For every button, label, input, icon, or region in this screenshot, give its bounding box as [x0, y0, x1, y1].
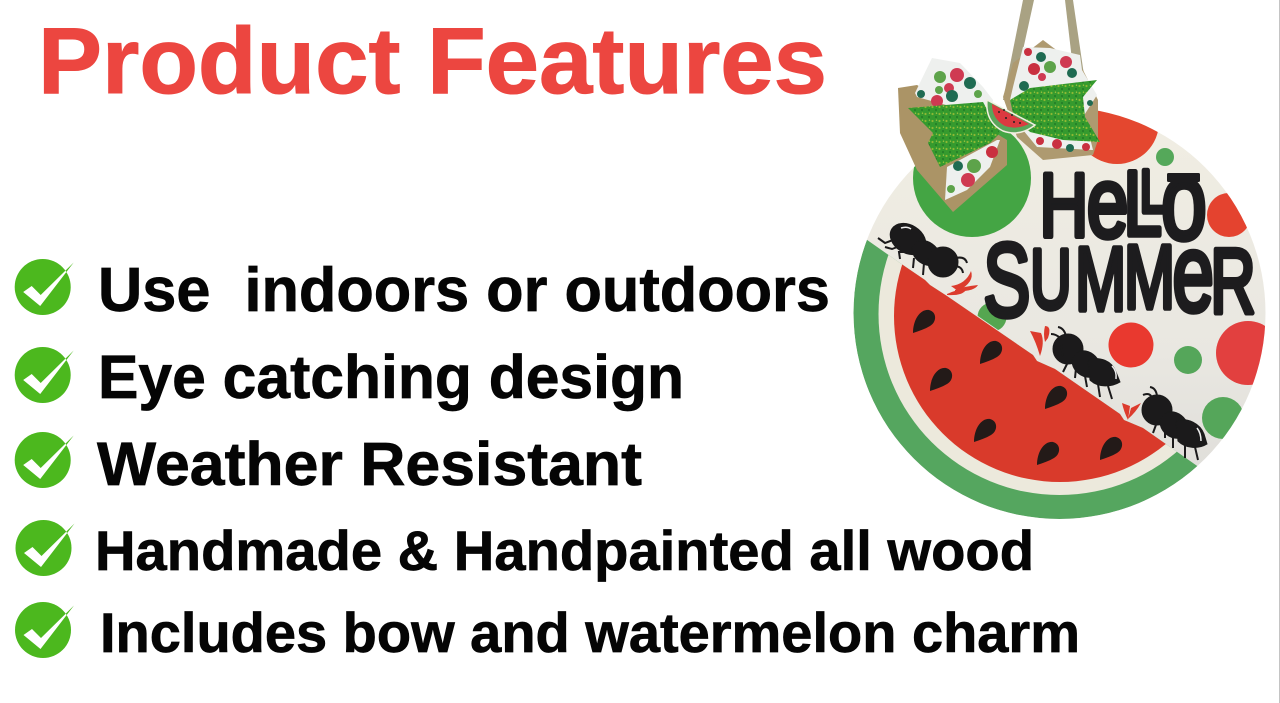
- icon: check badge 4: [16, 520, 74, 576]
- hello summer lettering: e: [1172, 212, 1214, 334]
- hello summer lettering: S: [983, 221, 1030, 338]
- ant 3 highlight: [1197, 428, 1201, 441]
- juice splash 3: [1122, 403, 1141, 420]
- round board: [854, 107, 1266, 519]
- label 4: Handmade & Handpainted all wood: [95, 519, 1034, 582]
- polka ribbon upper left: [915, 58, 993, 117]
- hello summer lettering: L: [1124, 152, 1162, 255]
- product: watermelon door sign: [854, 0, 1280, 519]
- burlap loop right: [1003, 40, 1098, 160]
- ant 3: [1142, 387, 1207, 460]
- glitter tail right: [1010, 80, 1100, 142]
- ant 1 highlight: [901, 227, 911, 229]
- hello summer lettering: R: [1210, 230, 1256, 333]
- hello summer lettering: o: [1161, 139, 1207, 263]
- juice splash 1: [947, 271, 978, 295]
- feature 5: bow and charm: [15, 602, 1077, 658]
- icon: check badge 1: [15, 259, 74, 315]
- hello summer lettering: e: [1087, 146, 1128, 258]
- hello summer lettering: L: [1140, 159, 1165, 226]
- flesh: [894, 264, 1166, 482]
- juice splash 2: [1030, 326, 1049, 356]
- ant 1: [878, 217, 967, 277]
- ant 2 highlight: [1112, 366, 1116, 379]
- label 2: Eye catching design: [98, 343, 684, 411]
- pith: [878, 255, 1177, 495]
- polka dots: [913, 110, 1265, 439]
- hello summer lettering: [983, 139, 1256, 338]
- watermelon slice: [854, 240, 1198, 519]
- polka ribbon lower left: [945, 140, 1000, 200]
- hello summer lettering: M: [1124, 227, 1175, 328]
- polka ribbon upper right: [1010, 47, 1097, 117]
- right edge line: [1279, 0, 1280, 703]
- bow: [898, 40, 1100, 212]
- label 3: Weather Resistant: [97, 430, 642, 498]
- polka ribbon lower right: [1023, 130, 1093, 152]
- label 1: Use indoors or outdoors: [98, 256, 830, 325]
- hello summer lettering: M: [1075, 229, 1126, 330]
- burlap loop left: [898, 85, 1007, 212]
- label 5: Includes bow and watermelon charm: [100, 601, 1080, 664]
- feature 1: indoors or outdoors: [14, 259, 828, 315]
- icon: check badge 2: [15, 347, 74, 403]
- watermelon charm: [987, 100, 1035, 133]
- title: Product Features: [38, 8, 827, 113]
- icon: check badge 5: [15, 602, 74, 658]
- feature 3: weather resistant: [14, 432, 642, 488]
- rind: [854, 240, 1198, 519]
- hanging straps: [1003, 0, 1084, 100]
- hello summer lettering: U: [1030, 233, 1071, 327]
- feature 2: eye catching design: [15, 343, 684, 411]
- glitter tail left: [908, 102, 1000, 167]
- feature list: [15, 256, 1080, 664]
- seeds: [913, 310, 1122, 465]
- ant 2: [1051, 327, 1120, 399]
- hello summer lettering: H: [1040, 155, 1088, 255]
- icon: check badge 3: [15, 432, 74, 488]
- feature 4: handmade: [16, 519, 1034, 582]
